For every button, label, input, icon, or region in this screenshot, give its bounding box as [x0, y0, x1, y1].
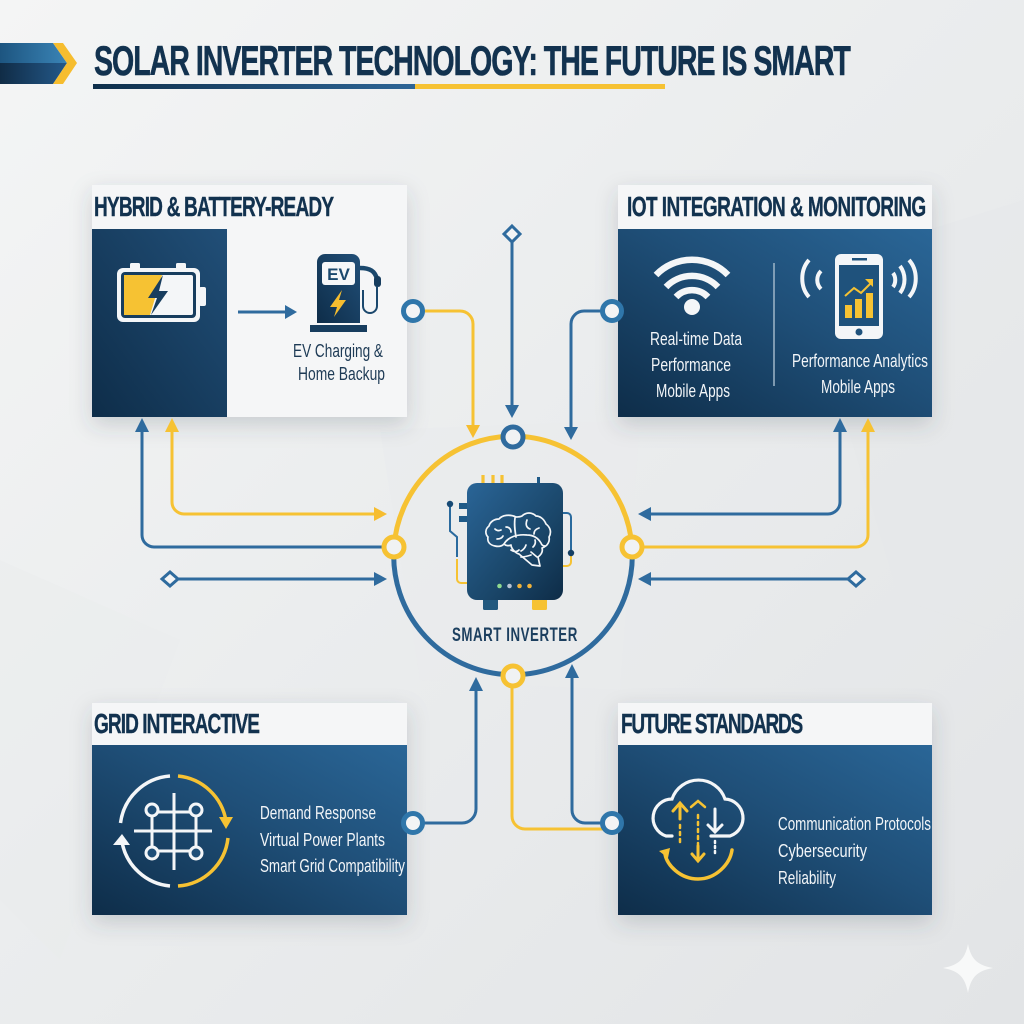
icon: smart inverter device [447, 475, 574, 610]
text: grid list [260, 803, 405, 876]
panel: grid interactive [92, 703, 407, 915]
icon: EV charger: EV [327, 265, 350, 284]
connector: hybrid to inverter [404, 302, 480, 438]
panel: future standards [618, 703, 932, 915]
status LEDs [497, 584, 532, 588]
text: IoT left list: Performance [651, 355, 731, 375]
connector: top diamond link [504, 226, 520, 418]
icon: brain [486, 513, 550, 566]
heading: IoT: IOT INTEGRATION & MONITORING [627, 191, 926, 223]
connector: right yellow link [642, 418, 875, 547]
connector: IoT to inverter [564, 302, 622, 440]
icon: phone with signal [802, 254, 916, 339]
icon: wifi [656, 260, 728, 315]
icon: sparkle watermark [943, 944, 993, 993]
connector: left yellow link [165, 418, 387, 521]
title underline [93, 84, 665, 89]
panel: hybrid and battery-ready [92, 185, 407, 417]
connector: left diamond link [162, 572, 387, 586]
connector: right blue link [638, 418, 847, 521]
text: IoT right list: Mobile Apps [821, 377, 895, 397]
connector: grid to inverter [404, 677, 483, 832]
connector: future to inverter [512, 664, 622, 832]
text: IoT right list [792, 351, 928, 397]
grid body [92, 745, 407, 915]
heading: hybrid: HYBRID & BATTERY-READY [94, 191, 334, 223]
text: future list [778, 814, 931, 888]
icon: EV charger [310, 254, 381, 332]
arrow: battery to EV [238, 305, 297, 319]
icon: grid with cycle arrows [113, 776, 233, 886]
text: IoT left list: Real-time Data [650, 329, 743, 349]
title: SOLAR INVERTER TECHNOLOGY: THE FUTURE IS SMART [94, 36, 851, 84]
text: EV charging [293, 341, 385, 384]
header chevron icon [0, 43, 77, 84]
text: future list: Communication Protocols [778, 814, 931, 834]
label: smart inverter: SMART INVERTER [452, 625, 577, 646]
text: grid list: Virtual Power Plants [260, 830, 385, 850]
panel: IoT integration and monitoring [618, 185, 932, 417]
future body [618, 745, 932, 915]
text: future list: Reliability [778, 868, 836, 888]
text: IoT left list [650, 329, 743, 401]
icon: battery [117, 263, 206, 322]
text: future list: Cybersecurity [778, 841, 867, 861]
IoT body [618, 229, 932, 417]
heading: grid: GRID INTERACTIVE [94, 708, 260, 740]
text: EV charging: Home Backup [298, 364, 385, 384]
text: grid list: Demand Response [260, 803, 376, 823]
text: EV charging: EV Charging & [293, 341, 383, 361]
connector: right diamond link [638, 572, 864, 586]
central ring [384, 427, 642, 686]
dark battery block [92, 229, 227, 417]
icon: cloud with data arrows [653, 780, 743, 879]
connector: left blue link [135, 418, 385, 547]
heading: future: FUTURE STANDARDS [621, 708, 803, 740]
text: IoT left list: Mobile Apps [656, 381, 730, 401]
text: IoT right list: Performance Analytics [792, 351, 928, 371]
text: grid list: Smart Grid Compatibility [260, 856, 405, 876]
